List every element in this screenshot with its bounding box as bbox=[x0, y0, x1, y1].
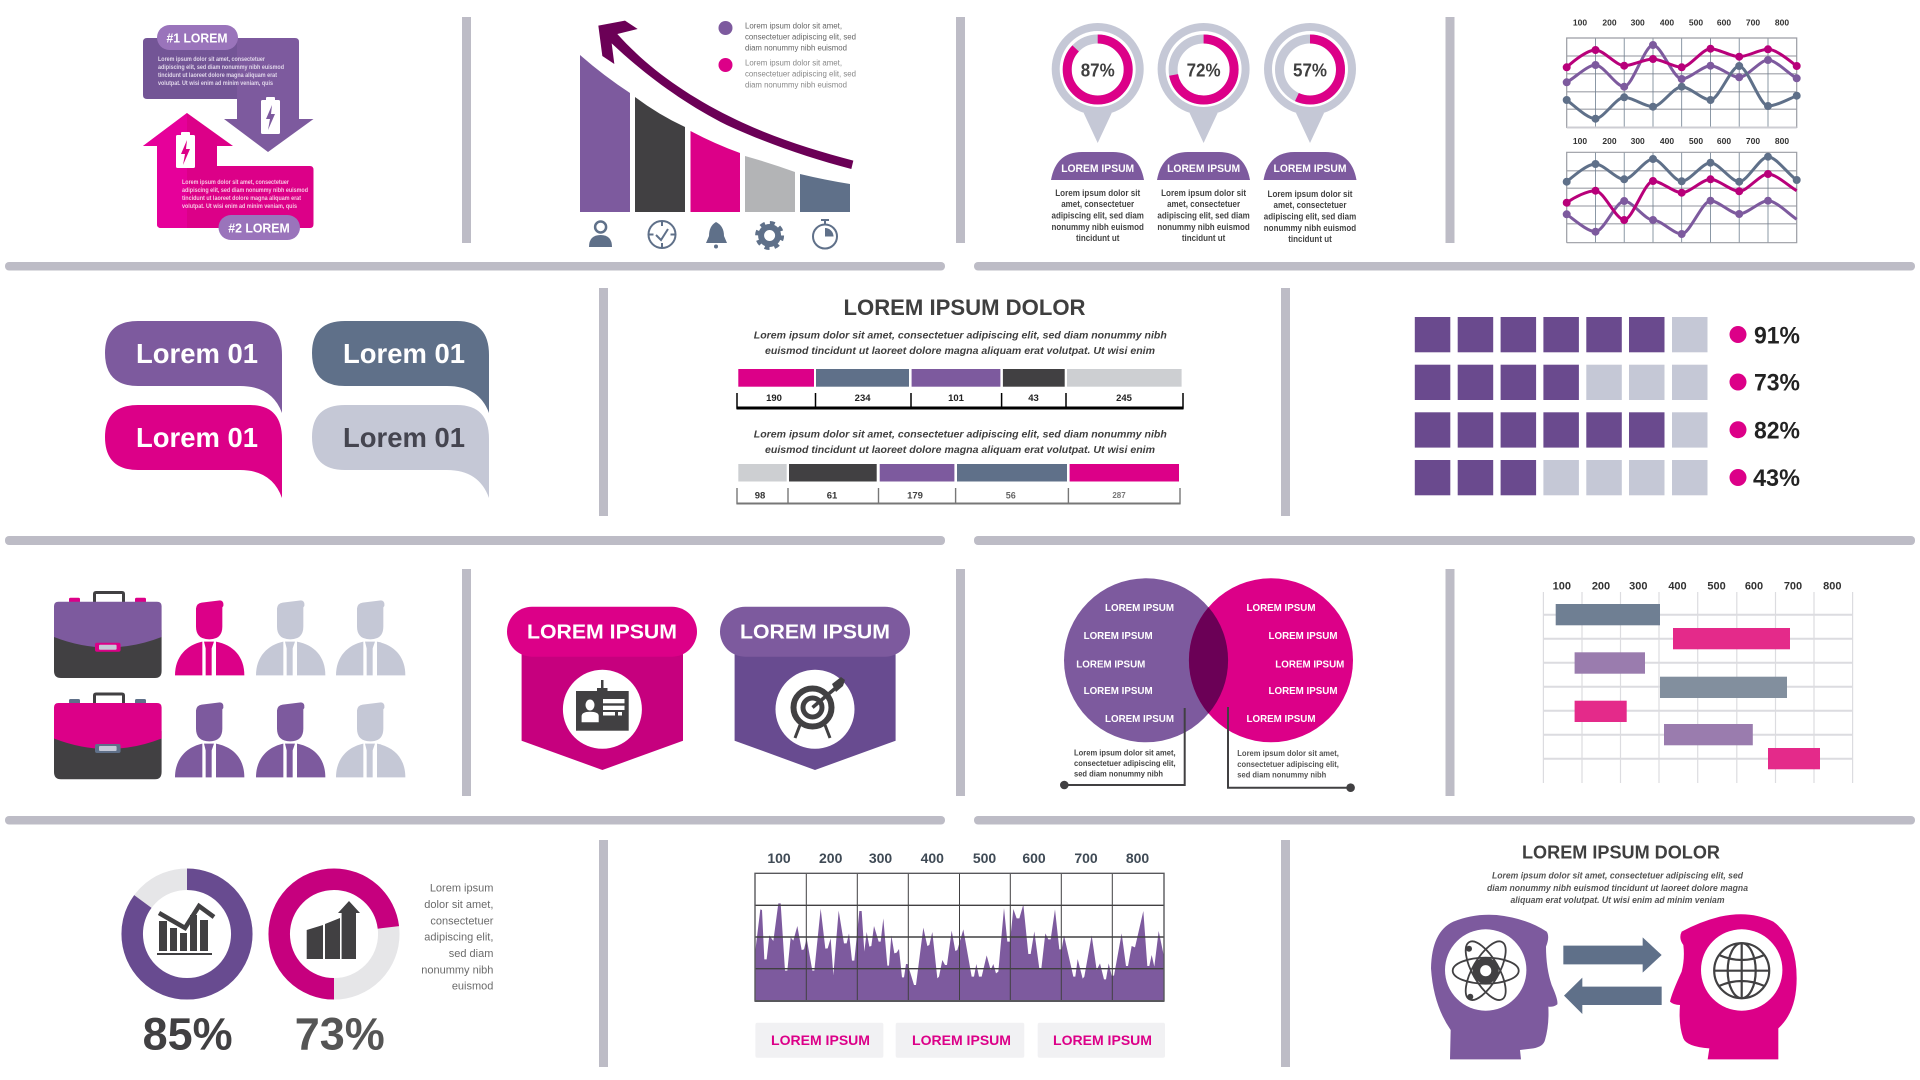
progress row: 82% bbox=[1415, 412, 1800, 448]
axis labels: 300 bbox=[1629, 580, 1647, 592]
line chart: bottom: 700 bbox=[1746, 136, 1760, 146]
panel: segmented bars bbox=[736, 295, 1184, 504]
icon: person purple bbox=[175, 702, 244, 777]
legend bbox=[718, 21, 856, 90]
pill: #2 lorem bbox=[218, 215, 300, 240]
panel: venn diagram bbox=[1060, 578, 1355, 792]
line chart: bottom bbox=[1567, 136, 1797, 243]
stacked bar: second: 61 bbox=[827, 490, 838, 502]
legend: diam nonummy nibh euismod bbox=[745, 44, 847, 52]
line chart: top: 100 bbox=[1573, 18, 1587, 28]
label chip 2 bbox=[896, 1023, 1024, 1058]
venn labels: right: LOREM IPSUM bbox=[1246, 714, 1316, 725]
bubble: magenta bbox=[105, 405, 282, 498]
axis labels bbox=[767, 850, 1149, 866]
progress row: 73%: 73% bbox=[1754, 370, 1800, 397]
progress row: 73% bbox=[1415, 365, 1800, 400]
magenta up-arrow callout: volutpat. Ut wisi enim ad minim veniam, quis bbox=[182, 204, 298, 210]
line chart: bottom: 100 bbox=[1573, 136, 1587, 146]
line chart: bottom: 200 bbox=[1602, 136, 1617, 146]
callout: left: Lorem ipsum dolor sit amet, bbox=[1074, 747, 1176, 757]
pin: 72%: 72% bbox=[1187, 60, 1221, 81]
axis labels: 700 bbox=[1074, 850, 1098, 866]
pin: 72% bbox=[1158, 23, 1250, 143]
bubble: light grey bbox=[312, 405, 489, 498]
axis labels: 600 bbox=[1022, 850, 1046, 866]
icon: person grey bbox=[336, 702, 405, 777]
panel: line charts bbox=[1567, 18, 1797, 243]
progress row: 43%: 43% bbox=[1753, 465, 1800, 492]
axis labels: 300 bbox=[869, 850, 892, 866]
label: column 3: LOREM IPSUM bbox=[1274, 163, 1346, 175]
venn labels: left: LOREM IPSUM bbox=[1084, 631, 1153, 642]
label: column 3 bbox=[1264, 152, 1356, 244]
stacked bar: first: 234 bbox=[855, 393, 871, 404]
icon: gear bbox=[757, 223, 782, 248]
line chart: bottom: 300 bbox=[1631, 136, 1645, 146]
progress row: 82%: 82% bbox=[1754, 417, 1800, 444]
icon: person bbox=[589, 222, 612, 247]
label: column 2: amet, consectetuer bbox=[1167, 199, 1241, 209]
text block: second description: Lorem ipsum dolor sit amet, consectetuer adipiscing elit, sed diam nonummy nibh bbox=[754, 428, 1167, 440]
pill: #1 lorem: #1 LOREM bbox=[166, 32, 228, 46]
label: column 1: tincidunt ut bbox=[1076, 233, 1119, 243]
label: column 2: tincidunt ut bbox=[1182, 233, 1225, 243]
icon: stopwatch bbox=[813, 220, 837, 248]
panel: location pin gauges bbox=[1051, 23, 1356, 244]
panel: donut charts bbox=[132, 879, 494, 1059]
legend: consectetuer adipiscing elit, sed bbox=[745, 32, 856, 42]
text block: description: Lorem ipsum dolor sit amet, consectetuer adipiscing elit, sed bbox=[1492, 870, 1743, 882]
label: column 3: adipiscing elit, sed diam bbox=[1264, 212, 1356, 222]
venn labels: right: LOREM IPSUM bbox=[1268, 631, 1338, 642]
label: column 1: amet, consectetuer bbox=[1061, 199, 1135, 209]
pin: 57% bbox=[1264, 23, 1356, 143]
purple down-arrow callout: volutpat. Ut wisi enim ad minim veniam, quis bbox=[158, 81, 274, 87]
venn labels: right: LOREM IPSUM bbox=[1268, 686, 1338, 697]
line chart: top: 500 bbox=[1689, 18, 1703, 28]
callout: right bbox=[1228, 707, 1355, 792]
venn circles bbox=[1064, 578, 1353, 742]
panel: badges bbox=[507, 607, 910, 770]
label chip 1 bbox=[755, 1023, 883, 1058]
label: column 2 bbox=[1157, 152, 1250, 243]
progress row: 91% bbox=[1415, 317, 1800, 352]
axis labels: 500 bbox=[1707, 580, 1726, 592]
callout: right: sed diam nonummy nibh bbox=[1237, 769, 1326, 779]
text block: second description: euismod tincidunt ut laoreet dolore magna aliquam erat volutpat. Ut wisi enim bbox=[765, 444, 1155, 456]
line chart: top: 800 bbox=[1775, 18, 1789, 28]
badge: magenta ID card bbox=[507, 607, 697, 770]
line chart: top: 700 bbox=[1746, 18, 1760, 28]
donut chart: 85% bbox=[132, 879, 242, 1059]
panel: square progress rows bbox=[1415, 317, 1800, 495]
magenta up-arrow callout: tincidunt ut laoreet dolore magna aliquam erat bbox=[182, 196, 301, 202]
label: column 2: LOREM IPSUM bbox=[1167, 163, 1240, 175]
line chart: top: 600 bbox=[1717, 18, 1731, 28]
callout: left: sed diam nonummy nibh bbox=[1074, 768, 1163, 778]
text block: first description bbox=[754, 330, 1167, 357]
axis labels: 200 bbox=[1592, 580, 1610, 592]
text block: right-aligned bbox=[421, 882, 494, 993]
stacked bar: second: 287 bbox=[1112, 491, 1126, 500]
label chip 3: LOREM IPSUM bbox=[1053, 1032, 1152, 1048]
label: column 1: adipiscing elit, sed diam bbox=[1052, 210, 1144, 220]
magenta up-arrow callout: Lorem ipsum dolor sit amet, consectetuer bbox=[182, 180, 290, 186]
line chart: top: 200 bbox=[1602, 18, 1617, 28]
label: column 2: adipiscing elit, sed diam bbox=[1157, 210, 1250, 220]
purple down-arrow callout: adipiscing elit, sed diam nonummy nibh euismod bbox=[158, 65, 284, 71]
label: column 3: tincidunt ut bbox=[1288, 234, 1332, 244]
pin: 87%: 87% bbox=[1081, 60, 1115, 81]
text block: first description: euismod tincidunt ut laoreet dolore magna aliquam erat volutpat. Ut wisi enim bbox=[765, 345, 1155, 357]
bubble: slate: Lorem 01 bbox=[343, 338, 465, 369]
venn labels: left: LOREM IPSUM bbox=[1105, 714, 1174, 725]
area series bbox=[755, 903, 1164, 1001]
legend: consectetuer adipiscing elit, sed bbox=[745, 70, 856, 78]
label: column 2: nonummy nibh euismod bbox=[1157, 222, 1250, 232]
label chip 1: LOREM IPSUM bbox=[771, 1032, 870, 1048]
line chart: top: 300 bbox=[1631, 18, 1645, 28]
head: magenta with globe bbox=[1670, 914, 1797, 1059]
panel: briefcases and people bbox=[54, 592, 405, 779]
progress row: 43% bbox=[1415, 460, 1800, 495]
text block: description: diam nonummy nibh euismod tincidunt ut laoreet dolore magna bbox=[1487, 883, 1748, 894]
text block: description bbox=[1487, 870, 1748, 906]
text block: right-aligned: nonummy nibh bbox=[421, 965, 493, 977]
bubble: light grey: Lorem 01 bbox=[343, 422, 465, 453]
label chip 3 bbox=[1038, 1023, 1165, 1058]
text block: right-aligned: Lorem ipsum bbox=[430, 882, 493, 894]
bubble: purple bbox=[105, 321, 282, 413]
progress row: 91%: 91% bbox=[1754, 322, 1800, 349]
icon: purple briefcase bbox=[54, 592, 162, 678]
donut chart: 73%: 73% bbox=[295, 1008, 385, 1059]
bubble: slate bbox=[312, 321, 489, 413]
legend: diam nonummy nibh euismod bbox=[745, 80, 847, 90]
venn labels: left: LOREM IPSUM bbox=[1084, 686, 1153, 697]
icon: person magenta bbox=[175, 600, 244, 675]
line chart: top: 400 bbox=[1660, 18, 1674, 28]
icon: bell bbox=[706, 222, 727, 248]
panel: heads exchange bbox=[1431, 842, 1797, 1059]
badge: magenta ID card: LOREM IPSUM bbox=[527, 621, 677, 643]
pill: #1 lorem bbox=[157, 25, 238, 50]
arrow: left bbox=[1564, 978, 1662, 1014]
text block: right-aligned: adipiscing elit, bbox=[424, 932, 493, 944]
donut chart: 73% bbox=[279, 879, 389, 1059]
axis labels: 100 bbox=[767, 850, 791, 866]
stacked bar: first: 43 bbox=[1028, 393, 1039, 404]
label: column 2: Lorem ipsum dolor sit bbox=[1161, 188, 1246, 198]
callout: left: consectetuer adipiscing elit, bbox=[1074, 758, 1176, 768]
venn labels: right bbox=[1246, 603, 1344, 725]
label chip 2: LOREM IPSUM bbox=[912, 1032, 1011, 1048]
text block: description: aliquam erat volutpat. Ut wisi enim ad minim veniam bbox=[1510, 895, 1725, 906]
pin: 87% bbox=[1052, 23, 1144, 143]
text block: right-aligned: consectetuer bbox=[430, 915, 494, 927]
axis labels bbox=[1553, 580, 1841, 592]
icon: person grey bbox=[336, 600, 405, 675]
bars bbox=[580, 55, 850, 212]
arrow: right bbox=[1563, 937, 1662, 973]
text block: first description: Lorem ipsum dolor sit amet, consectetuer adipiscing elit, sed diam nonummy nibh bbox=[754, 330, 1167, 342]
label: column 3: amet, consectetuer bbox=[1274, 200, 1347, 210]
label: column 1: nonummy nibh euismod bbox=[1052, 222, 1144, 232]
panel: descending bar chart bbox=[580, 21, 856, 248]
icon: magenta briefcase bbox=[54, 694, 162, 779]
panel: battery arrows bbox=[143, 25, 314, 240]
pin: 57%: 57% bbox=[1293, 60, 1327, 81]
text block: right-aligned: dolor sit amet, bbox=[424, 899, 493, 911]
axis labels: 700 bbox=[1784, 580, 1802, 592]
stacked bar: second: 179 bbox=[907, 490, 923, 502]
purple down-arrow callout bbox=[143, 38, 314, 152]
axis labels: 100 bbox=[1553, 580, 1571, 592]
panel: gantt chart bbox=[1543, 580, 1853, 783]
stacked bar: first: 245 bbox=[1116, 393, 1133, 404]
purple down-arrow callout: tincidunt ut laoreet dolore magna aliquam erat bbox=[158, 73, 277, 79]
line chart: bottom: 500 bbox=[1689, 136, 1703, 146]
gantt bars bbox=[1556, 604, 1820, 769]
badge: purple target: LOREM IPSUM bbox=[740, 621, 890, 643]
stacked bar: second: 98 bbox=[755, 490, 765, 502]
stacked bar: first: 190 bbox=[766, 393, 782, 404]
line chart: bottom: 800 bbox=[1775, 136, 1789, 146]
stacked bar: first bbox=[736, 369, 1184, 408]
callout: left bbox=[1060, 708, 1185, 789]
donut chart: 85%: 85% bbox=[143, 1008, 233, 1059]
axis labels: 800 bbox=[1823, 580, 1841, 592]
head: purple with atom bbox=[1431, 915, 1557, 1059]
badge: purple target bbox=[720, 607, 910, 770]
legend: Lorem ipsum dolor sit amet, bbox=[745, 22, 842, 30]
icon: person grey bbox=[256, 600, 325, 675]
panel: speech bubbles bbox=[105, 321, 489, 498]
title: LOREM IPSUM DOLOR bbox=[844, 295, 1086, 320]
text block: right-aligned: sed diam bbox=[449, 948, 493, 960]
magenta up-arrow callout: adipiscing elit, sed diam nonummy nibh euismod bbox=[182, 188, 308, 194]
venn labels: left: LOREM IPSUM bbox=[1105, 603, 1174, 614]
magenta up-arrow callout bbox=[143, 113, 314, 228]
title: LOREM IPSUM DOLOR bbox=[1522, 842, 1720, 862]
venn labels: right: LOREM IPSUM bbox=[1275, 660, 1344, 670]
callout: right: Lorem ipsum dolor sit amet, bbox=[1237, 748, 1339, 758]
venn labels: left bbox=[1076, 603, 1174, 725]
axis labels: 400 bbox=[921, 850, 944, 866]
bubble: magenta: Lorem 01 bbox=[136, 422, 258, 453]
label: column 3: nonummy nibh euismod bbox=[1264, 223, 1356, 233]
pill: #2 lorem: #2 LOREM bbox=[228, 222, 290, 236]
line chart: top bbox=[1567, 18, 1797, 128]
line chart: bottom: 400 bbox=[1660, 136, 1674, 146]
axis labels: 600 bbox=[1745, 580, 1763, 592]
label: column 1: LOREM IPSUM bbox=[1061, 163, 1134, 175]
arrow: rising curve bbox=[598, 21, 853, 169]
text block: second description bbox=[754, 428, 1167, 456]
icon: battery on purple arrow bbox=[261, 97, 280, 134]
venn labels: left: LOREM IPSUM bbox=[1076, 660, 1145, 670]
panel: area chart bbox=[755, 850, 1165, 1058]
legend: Lorem ipsum dolor sit amet, bbox=[745, 58, 842, 68]
label: column 1: Lorem ipsum dolor sit bbox=[1055, 188, 1140, 198]
stacked bar: second bbox=[736, 464, 1180, 504]
icon: clock bbox=[648, 221, 676, 248]
label: column 3: Lorem ipsum dolor sit bbox=[1268, 189, 1352, 199]
label: column 1 bbox=[1051, 152, 1144, 243]
bubble: purple: Lorem 01 bbox=[136, 338, 258, 369]
icon: person purple bbox=[256, 702, 325, 777]
callout: right: consectetuer adipiscing elit, bbox=[1237, 759, 1339, 769]
purple down-arrow callout: Lorem ipsum dolor sit amet, consectetuer bbox=[158, 57, 266, 63]
text block: right-aligned: euismod bbox=[452, 981, 493, 993]
venn labels: right: LOREM IPSUM bbox=[1246, 603, 1316, 614]
icon: battery on magenta arrow bbox=[176, 132, 195, 168]
line chart: bottom: 600 bbox=[1717, 136, 1731, 146]
axis labels: 400 bbox=[1668, 580, 1687, 592]
axis labels: 800 bbox=[1126, 850, 1149, 866]
axis labels: 500 bbox=[973, 850, 996, 866]
stacked bar: second: 56 bbox=[1006, 490, 1016, 500]
axis labels: 200 bbox=[819, 850, 843, 866]
stacked bar: first: 101 bbox=[948, 393, 965, 404]
